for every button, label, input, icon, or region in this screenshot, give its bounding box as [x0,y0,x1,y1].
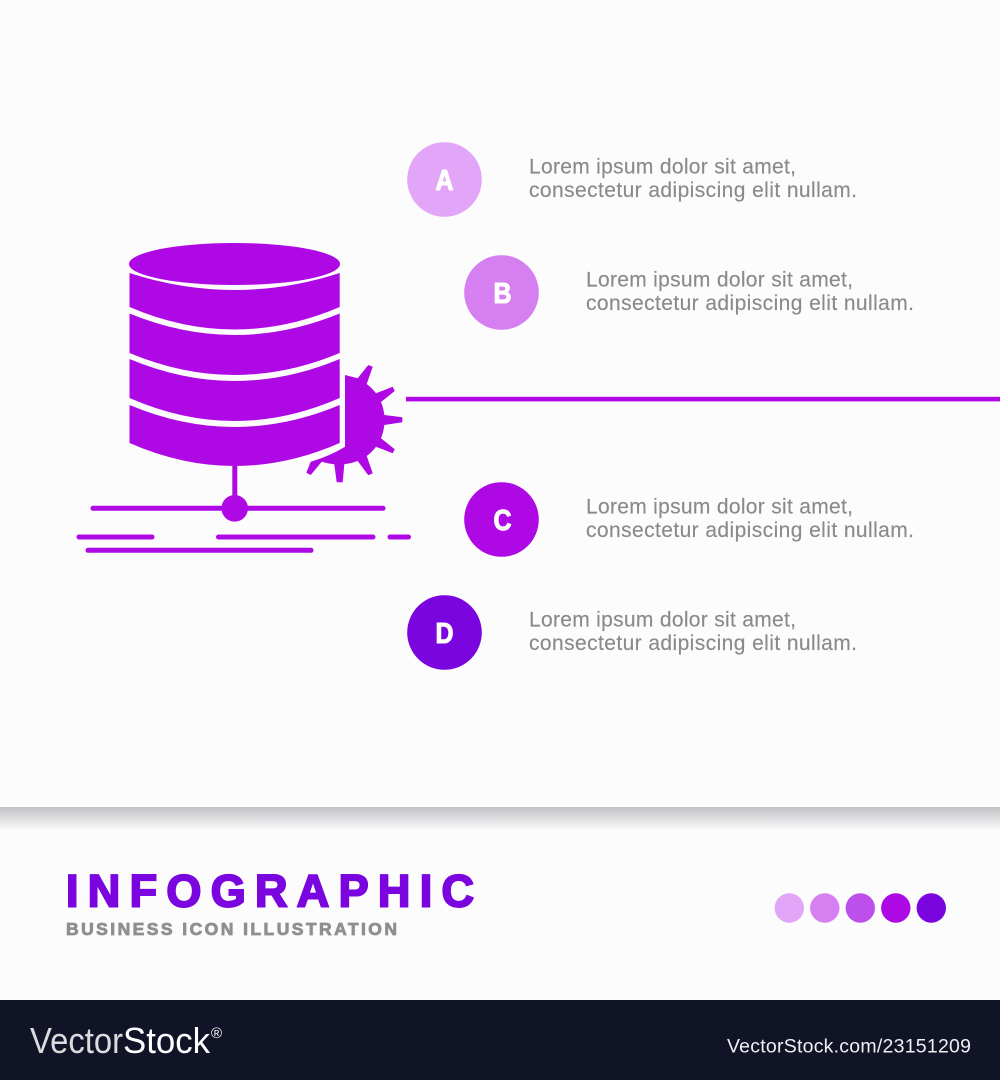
text A: consectetur adipiscing elit nullam. [529,179,857,202]
step D [407,595,857,670]
database tier 4 [130,405,340,466]
watermark id: VectorStock.com/23151209 [727,1036,971,1058]
palette dots [775,893,946,923]
network connector [232,466,237,502]
letter B: B [494,278,512,310]
database tier 1 [130,273,340,330]
database tier 3 [130,359,340,421]
horizontal timeline line [406,397,1000,401]
badge C [464,482,539,557]
watermark bar [0,1000,1000,1080]
step C [464,482,914,557]
icon: gear [306,365,402,482]
network node [221,495,248,522]
step A [407,142,857,217]
text D: consectetur adipiscing elit nullam. [529,632,857,655]
database top disc [129,243,340,285]
footer shadow band [0,807,1000,831]
database tier 2 [130,314,340,375]
text B: Lorem ipsum dolor sit amet, [586,268,853,292]
watermark logo: Stock [123,1020,211,1061]
text A: Lorem ipsum dolor sit amet, [529,156,796,178]
text B: consectetur adipiscing elit nullam. [586,292,914,315]
letter C: C [494,505,512,537]
letter A: A [436,165,454,197]
text C: Lorem ipsum dolor sit amet, [586,496,853,518]
watermark logo: ® [211,1025,222,1042]
icon: database with gear and network lines [79,243,408,550]
step B [464,255,914,330]
title: INFOGRAPHIC [66,866,474,916]
subtitle: BUSINESS ICON ILLUSTRATION [66,919,397,939]
text D: Lorem ipsum dolor sit amet, [529,608,796,632]
watermark logo: Vector [30,1020,123,1061]
badge A [407,142,482,217]
letter D: D [436,618,454,650]
badge B [464,255,539,330]
text C: consectetur adipiscing elit nullam. [586,519,914,542]
network lines [79,508,408,550]
badge D [407,595,482,670]
